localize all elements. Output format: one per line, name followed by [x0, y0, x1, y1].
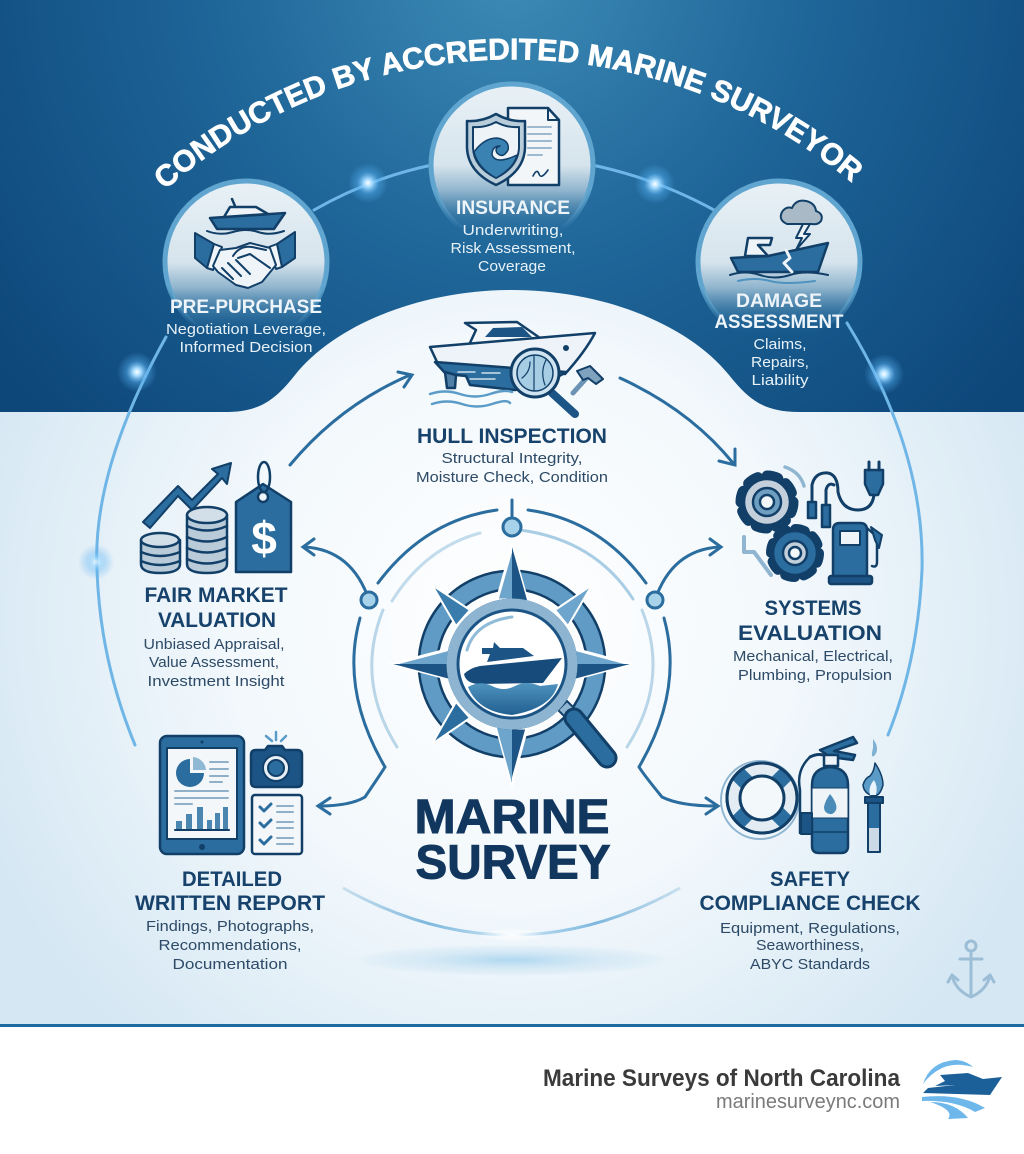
heading: safety compliance check: COMPLIANCE CHECK — [700, 892, 920, 915]
panel: damage assessment — [698, 181, 860, 389]
heading: hull inspection: HULL INSPECTION — [417, 425, 607, 448]
panel: hull inspection — [416, 322, 608, 486]
text: report details: Findings, Photographs, — [146, 918, 314, 935]
heading: systems evaluation: SYSTEMS — [764, 597, 862, 620]
arrows and connector network — [290, 372, 735, 814]
text: insurance benefits: Underwriting, — [462, 222, 564, 239]
text: valuation details — [144, 636, 285, 690]
panel: insurance — [431, 84, 593, 275]
text: report details — [146, 918, 314, 973]
heading: central title Marine Survey — [414, 791, 610, 890]
text: pre-purchase benefits — [166, 321, 326, 356]
footer band — [0, 1024, 1024, 1154]
heading: damage assessment — [714, 291, 844, 333]
icon: boat over handshake — [195, 199, 295, 288]
icon: coins, trend arrow and price tag: $ — [251, 512, 277, 564]
heading: insurance: INSURANCE — [456, 198, 570, 219]
text: pre-purchase benefits: Informed Decision — [180, 339, 312, 356]
text: damage benefits: Repairs, — [751, 354, 809, 371]
text: damage benefits: Claims, — [754, 336, 806, 353]
text: insurance benefits: Risk Assessment, — [450, 240, 576, 257]
text: pre-purchase benefits: Negotiation Leverage, — [166, 321, 326, 338]
heading: detailed written report: WRITTEN REPORT — [135, 892, 325, 915]
heading: fair market valuation: VALUATION — [158, 609, 276, 632]
text: valuation details: Value Assessment, — [149, 654, 279, 671]
text: valuation details: Unbiased Appraisal, — [144, 636, 284, 653]
icon: life ring, extinguisher and flare — [721, 737, 883, 853]
text: report details: Recommendations, — [158, 937, 302, 954]
text: valuation details: Investment Insight — [148, 673, 285, 690]
icon: boat hull with magnifier and hammer — [430, 322, 603, 414]
heading: systems evaluation: EVALUATION — [738, 622, 882, 645]
text: systems details: Mechanical, Electrical, — [733, 648, 893, 665]
heading: safety compliance check: SAFETY — [770, 868, 850, 891]
panel: pre-purchase — [165, 181, 327, 356]
connecting arcs and glowing nodes — [78, 163, 922, 745]
heading: central title Marine Survey: SURVEY — [416, 836, 610, 890]
text: safety details: Equipment, Regulations, — [720, 920, 900, 937]
text: systems details — [733, 648, 893, 684]
title: curved heading: CONDUCTED BY ACCREDITED MARINE SURVEYOR — [156, 38, 862, 186]
text: insurance benefits: Coverage — [478, 258, 546, 275]
heading: detailed written report — [135, 868, 325, 915]
panel: safety compliance check — [700, 737, 920, 973]
footer: company name: Marine Surveys of North Carolina — [543, 1065, 901, 1092]
text: safety details: Seaworthiness, — [756, 937, 864, 954]
panel: light lower background with dome — [0, 290, 1024, 1024]
text: systems details: Plumbing, Propulsion — [738, 667, 892, 684]
text: insurance benefits — [450, 222, 576, 275]
icon: shield and document — [467, 108, 559, 185]
text: hull details: Structural Integrity, — [442, 450, 582, 467]
text: report details: Documentation — [172, 956, 288, 973]
decorative bottom arc and pool of light — [343, 888, 680, 976]
icon: central compass with magnifier and boat — [393, 547, 630, 783]
icon: storm-damaged boat — [730, 201, 828, 283]
icon: anchor watermark — [948, 941, 994, 997]
heading: damage assessment: ASSESSMENT — [714, 312, 844, 333]
heading: damage assessment: DAMAGE — [736, 291, 822, 312]
heading: fair market valuation: FAIR MARKET — [144, 584, 288, 607]
heading: fair market valuation — [144, 584, 288, 632]
panel: systems evaluation — [733, 462, 893, 684]
heading: pre-purchase: PRE-PURCHASE — [170, 297, 322, 318]
panel: dark blue header background — [0, 0, 1024, 413]
heading: systems evaluation — [738, 597, 882, 645]
text: damage benefits: Liability — [752, 372, 809, 389]
footer: website: marinesurveync.com — [716, 1091, 900, 1113]
text: damage benefits — [751, 336, 809, 389]
icon: tablet, camera and checklist — [160, 732, 302, 854]
text: hull details: Moisture Check, Condition — [416, 469, 608, 486]
heading: central title Marine Survey: MARINE — [414, 791, 610, 844]
heading: detailed written report: DETAILED — [182, 868, 282, 891]
text: safety details: ABYC Standards — [750, 956, 870, 973]
panel: fair market valuation — [141, 462, 291, 690]
icon: footer ship logo — [922, 1060, 1002, 1119]
panel: detailed written report — [135, 732, 325, 973]
text: safety details — [720, 920, 900, 973]
icon: gears, cables and fuel pump — [741, 462, 883, 584]
icon: coins, trend arrow and price tag — [141, 462, 291, 573]
text: hull details — [416, 450, 608, 486]
heading: safety compliance check — [700, 868, 920, 915]
